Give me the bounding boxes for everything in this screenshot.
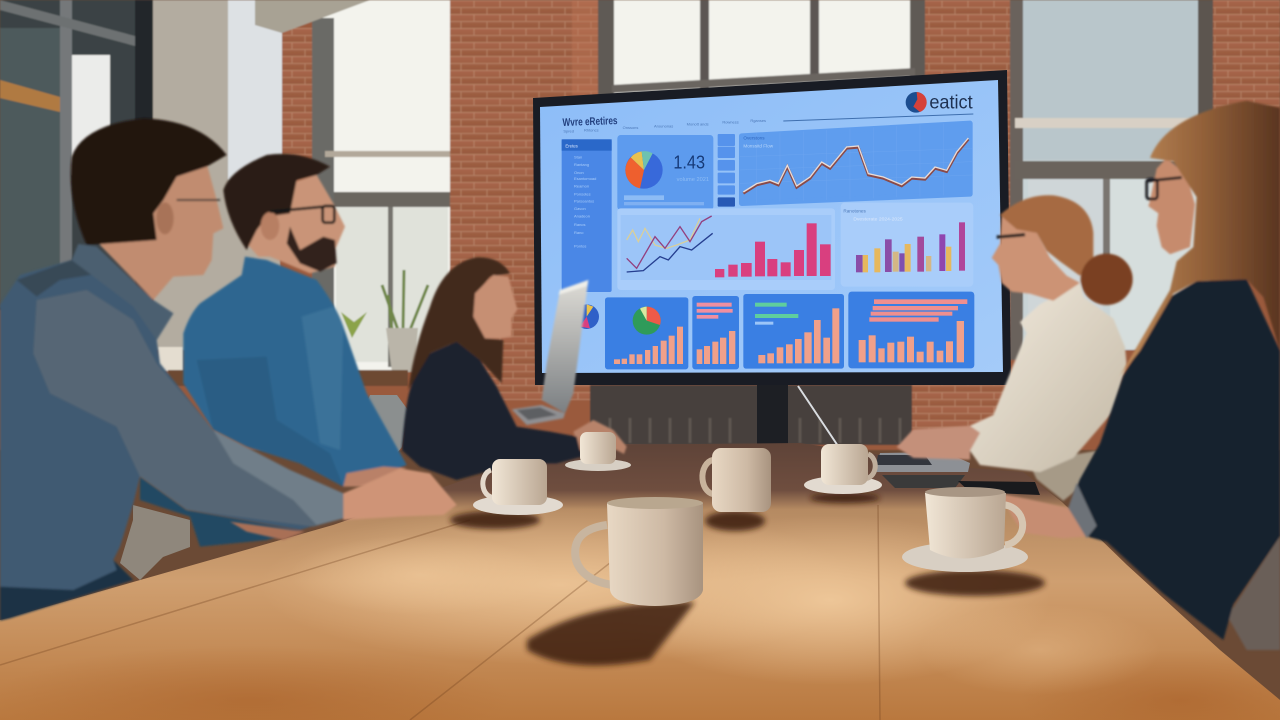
bottom panel 4 — [848, 292, 974, 368]
sidebar panel: Rantang — [574, 162, 589, 167]
hair — [1000, 195, 1093, 276]
bottom panel 2 — [692, 296, 739, 369]
hands on keyboard — [897, 426, 980, 460]
lower shirt behind arm — [140, 477, 300, 547]
sidebar panel: Onon — [574, 170, 584, 175]
cup right foreground with saucer — [902, 487, 1028, 572]
hair — [1120, 101, 1280, 376]
sidebar panel: Ranos — [574, 222, 586, 227]
office chair — [1163, 536, 1280, 650]
blouse — [970, 283, 1127, 472]
lit sleeve — [33, 290, 343, 527]
mid right grouped bar chart panel: Dvesterate 2024-2025 — [853, 217, 903, 223]
hand on table — [343, 468, 457, 520]
bottom panel 3 — [743, 294, 844, 369]
ear — [156, 202, 174, 234]
fingers under arm — [230, 522, 305, 540]
cup left with saucer — [473, 459, 563, 515]
line chart panel: Overstons — [743, 135, 765, 140]
small tile column — [718, 134, 735, 207]
person 3: woman at laptop — [402, 257, 627, 480]
nav labels — [563, 118, 766, 133]
trousers — [0, 560, 133, 621]
table top — [0, 443, 1280, 720]
collar — [72, 244, 173, 340]
bottom panel 1 — [605, 297, 688, 369]
lower blouse — [1030, 451, 1097, 501]
sidebar panel: Pontos — [574, 243, 586, 248]
white box on sill — [158, 347, 183, 371]
laptop on table — [512, 280, 588, 425]
nav labels: Rowness — [722, 120, 739, 125]
brand logo — [906, 92, 973, 113]
glasses — [270, 206, 334, 223]
nav labels: Onssons — [623, 125, 638, 130]
dashboard contents in zoomed coordinate space — [562, 92, 974, 369]
hand on table — [1000, 494, 1087, 538]
small pie partly hidden by laptop — [574, 304, 599, 329]
beard — [287, 227, 337, 272]
cable — [798, 386, 838, 446]
display stand — [757, 383, 788, 445]
grey wall column — [153, 0, 282, 350]
hair — [223, 154, 330, 250]
brick column C — [925, 0, 1010, 430]
dashboard title: Wvre eRetires — [562, 115, 618, 129]
cup center rear — [702, 448, 771, 512]
mid left combo chart panel — [617, 208, 835, 290]
nav labels: Arounonas — [654, 123, 673, 128]
brick column A — [282, 28, 312, 156]
line chart panel — [740, 123, 973, 203]
ceiling beam — [255, 0, 370, 33]
pie chart panel: volume 2021 — [677, 177, 709, 183]
bezel — [533, 70, 1011, 385]
pie chart panel — [617, 135, 713, 210]
sidebar panel: Parsoantos — [574, 199, 594, 204]
top — [402, 342, 582, 480]
sidebar panel: Stan — [574, 154, 582, 159]
sidebar panel: Rano — [574, 230, 584, 235]
window A — [312, 0, 460, 370]
shirt — [183, 257, 407, 487]
left glazed partition — [0, 0, 155, 310]
window B — [598, 0, 926, 100]
hands — [573, 420, 627, 454]
key figure: 1.43 — [673, 151, 705, 172]
face and neck — [992, 215, 1080, 301]
brick below display right — [912, 385, 1012, 430]
glasses — [997, 235, 1025, 237]
top — [1068, 279, 1280, 640]
shirt yoke — [17, 260, 100, 297]
brick column D — [1213, 0, 1280, 110]
sidebar panel: Reamon — [574, 184, 589, 189]
cup right rear with saucer — [804, 444, 882, 494]
person 5: woman in dark top — [1000, 101, 1280, 650]
nav labels: Monott ands — [687, 121, 709, 126]
brand logo: eatict — [929, 92, 973, 113]
window C — [1010, 0, 1213, 360]
hair — [408, 257, 510, 390]
mug shadows on table — [450, 493, 1045, 666]
sidebar panel: Anadeon — [574, 213, 590, 218]
hair bun — [1081, 254, 1133, 305]
person 2: bearded man in blue shirt — [140, 154, 407, 547]
sidebar panel: Eretes — [565, 144, 578, 149]
nav labels: Spred — [563, 128, 574, 133]
screen surface — [540, 80, 1003, 373]
face — [247, 175, 345, 273]
window plant and pot — [341, 270, 428, 372]
sleeve cuff — [1068, 483, 1097, 538]
person 4: woman in cream blouse — [897, 195, 1133, 501]
sidebar panel: Ponsotes — [574, 192, 591, 197]
face — [1148, 158, 1195, 254]
mid right grouped bar chart panel — [841, 203, 973, 287]
chair behind person 3 — [339, 395, 408, 477]
shirt — [0, 244, 343, 590]
window sill — [168, 370, 408, 386]
hand under — [343, 467, 407, 487]
keyboard and desk items — [875, 452, 1040, 495]
neck and face — [100, 163, 223, 300]
ear — [261, 212, 279, 240]
sidebar panel: Esantomoad — [574, 176, 596, 181]
sidebar panel: Gavon — [574, 206, 586, 211]
face — [473, 275, 517, 338]
cup beside laptop — [565, 432, 631, 471]
nav labels: Rganses — [750, 118, 766, 123]
line chart panel: Monssitd Flow — [743, 144, 774, 149]
large foreground cup — [575, 497, 703, 606]
glasses — [1147, 177, 1182, 199]
coffee cups — [473, 432, 1028, 606]
back wall and windows — [0, 0, 1280, 450]
mid right grouped bar chart panel: Ranotones — [843, 209, 867, 214]
chair behind person 1 — [120, 505, 190, 580]
hair — [71, 118, 227, 245]
dashboard display — [533, 70, 1011, 385]
radiator under display — [590, 385, 912, 445]
sidebar panel — [562, 139, 612, 292]
brick column B — [450, 0, 600, 400]
glasses — [177, 197, 220, 202]
nav labels: Rhtoncs — [584, 127, 599, 132]
person 1: man in denim shirt — [0, 118, 457, 621]
